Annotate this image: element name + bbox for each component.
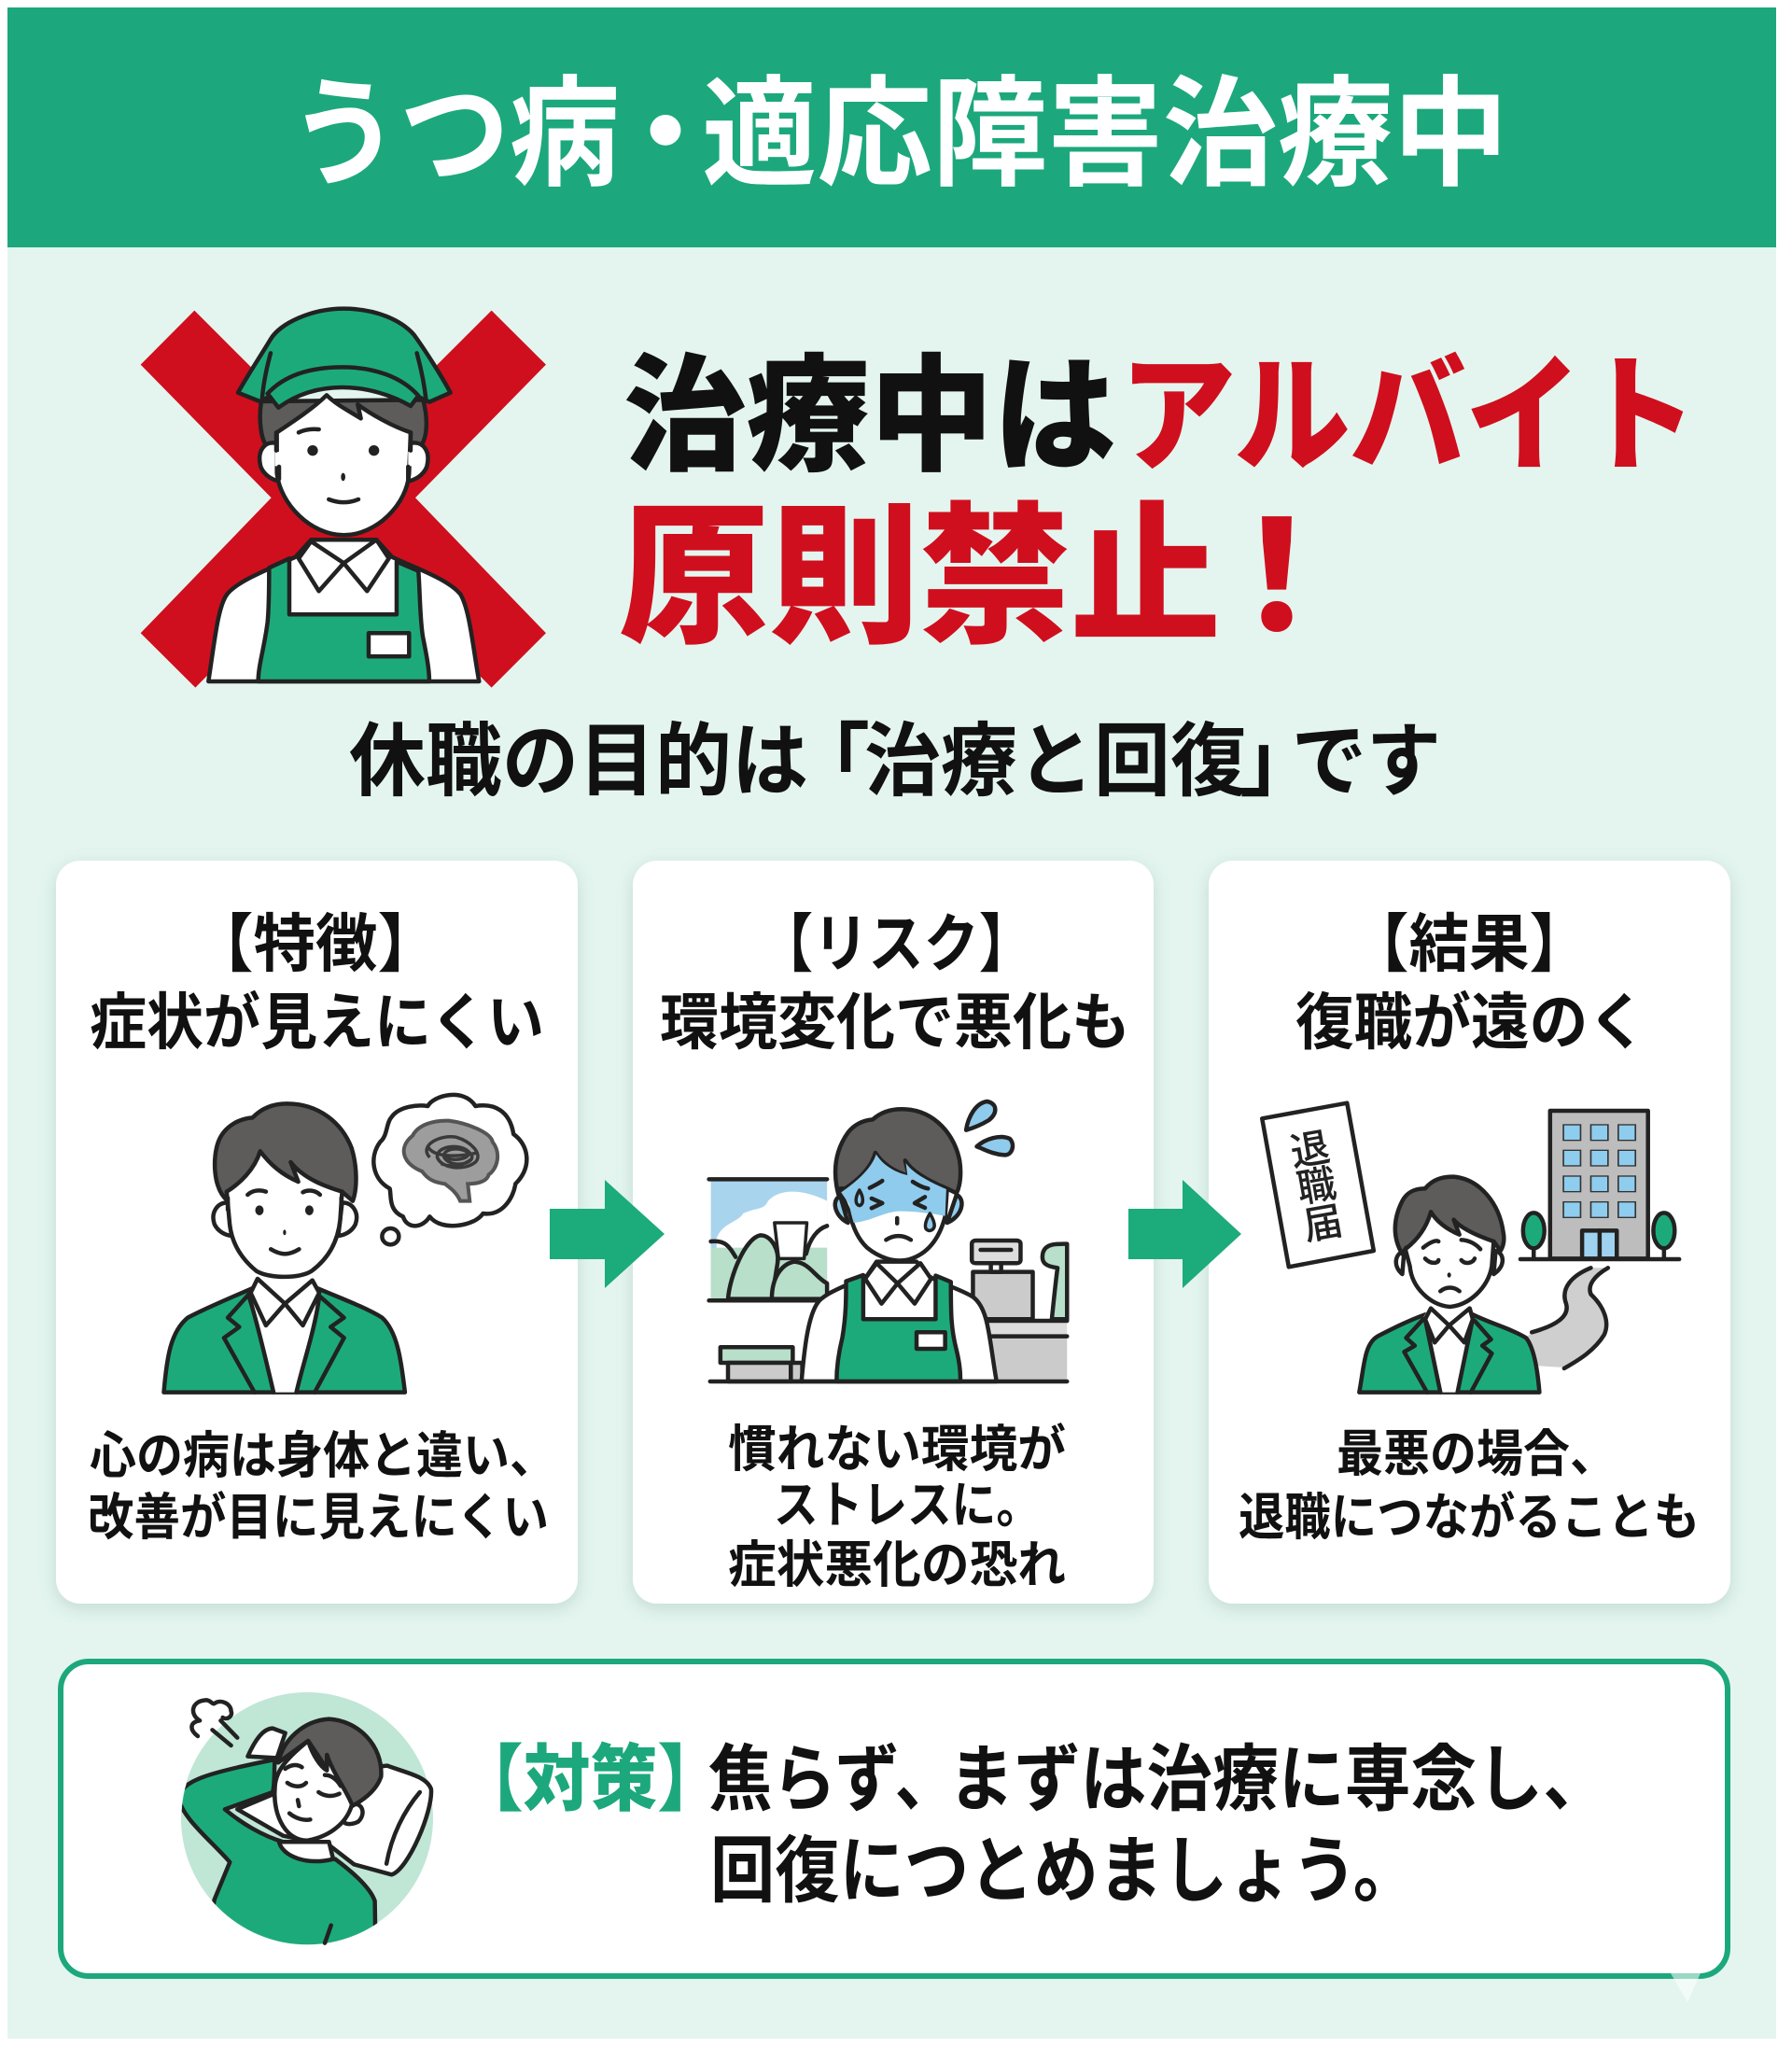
panel: risk card — [633, 861, 1154, 1604]
subheading: 休職の目的は — [349, 717, 808, 806]
card description — [88, 1428, 556, 1546]
card description: ストレスに。 — [774, 1478, 1041, 1534]
subheading: 「 — [790, 717, 870, 806]
countermeasure text — [456, 1738, 1609, 1912]
card description: 最悪の場合、 — [1337, 1426, 1617, 1482]
countermeasure text: 焦らず、 — [708, 1738, 959, 1820]
heading: treatment and part-time job ban: 原則禁止 — [619, 492, 1221, 663]
countermeasure text: 回復につとめましょう。 — [710, 1830, 1418, 1912]
icon: stressed clerk at a shop counter — [709, 1101, 1067, 1381]
card heading: 症状が見えにくい — [90, 988, 544, 1057]
subheading — [349, 717, 1441, 806]
card description: 退職につながることも — [1239, 1490, 1700, 1546]
heading: treatment and part-time job ban — [619, 345, 1697, 663]
card heading: 復職が遠のく — [1295, 988, 1646, 1057]
card heading: 環境変化で悪化も — [660, 988, 1130, 1057]
card description — [728, 1422, 1066, 1593]
subheading: 治療と回復 — [864, 717, 1247, 806]
card description: 慣れない環境が — [728, 1422, 1066, 1478]
title banner: うつ病 — [289, 68, 620, 202]
card heading: 【特徴】 — [191, 909, 440, 980]
card description — [1239, 1426, 1700, 1546]
icon: resignation letter, person and office building: 届 — [1300, 1199, 1346, 1249]
watermark mark — [1671, 1973, 1701, 2002]
card description: 心の病は身体と違い、 — [90, 1428, 556, 1484]
countermeasure text: 【対策】 — [456, 1738, 724, 1820]
icon: resignation letter, person and office building: 職 — [1294, 1161, 1339, 1212]
arrow: risk to result — [1128, 1180, 1241, 1288]
card heading — [90, 909, 544, 1057]
countermeasure text: まずは治療に専念し、 — [948, 1738, 1609, 1820]
subheading: です — [1292, 717, 1441, 806]
card heading — [660, 909, 1130, 1057]
panel: result card — [1209, 861, 1730, 1604]
subheading: 」 — [1239, 717, 1320, 806]
panel: countermeasure box — [61, 1661, 1728, 1976]
card description: 改善が目に見えにくい — [88, 1490, 549, 1546]
icon: resignation letter, person and office building: 退 — [1287, 1125, 1333, 1175]
card heading — [1295, 909, 1646, 1057]
card heading: 【リスク】 — [758, 909, 1034, 980]
icon: resignation letter, person and office building — [1262, 1103, 1679, 1393]
icon: person resting on a pillow — [179, 1692, 433, 1954]
title banner — [7, 7, 1776, 247]
heading: treatment and part-time job ban: 治療中は — [623, 345, 1116, 487]
icon: part-time worker over red X — [141, 309, 546, 688]
icon: smiling person with tangled thought — [164, 1095, 526, 1393]
heading: treatment and part-time job ban: アルバイト — [1120, 345, 1697, 487]
card description: 症状悪化の恐れ — [728, 1537, 1066, 1593]
arrow: feature to risk — [550, 1180, 665, 1288]
title banner: ・ — [606, 68, 725, 202]
title banner: 適応障害治療中 — [702, 68, 1508, 202]
card heading: 【結果】 — [1349, 909, 1589, 980]
heading: treatment and part-time job ban: ！ — [1200, 492, 1353, 663]
panel: feature card — [56, 861, 578, 1604]
